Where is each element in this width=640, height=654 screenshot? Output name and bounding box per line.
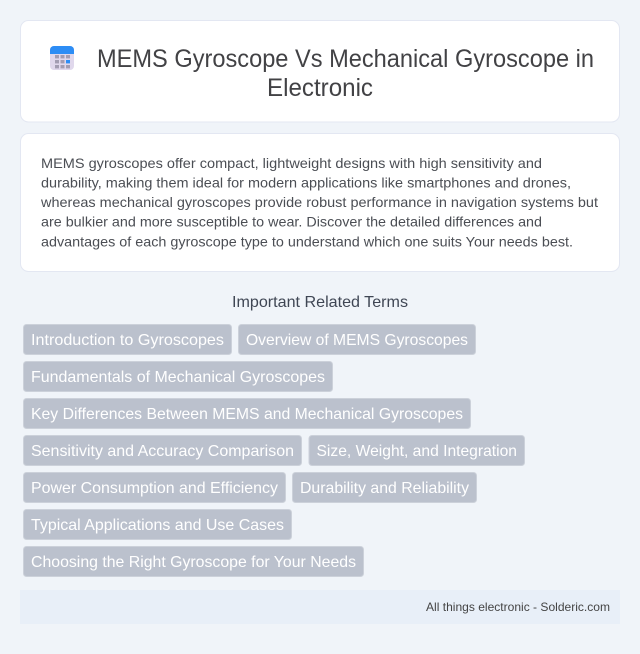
text block: description: durability, making them ideal for modern applications like smartphones and drones, <box>41 174 571 190</box>
tag: fundamentals <box>24 362 332 392</box>
title: MEMS Gyroscope Vs Mechanical Gyroscope in <box>97 45 594 73</box>
tag: overview <box>238 324 476 354</box>
panel: description <box>20 134 620 272</box>
text block: description: whereas mechanical gyroscopes provide robust performance in navigation systems but <box>40 194 598 210</box>
tag: durability <box>292 472 476 502</box>
tag: introduction: Introduction to Gyroscopes <box>31 332 224 349</box>
title: Electronic <box>267 74 373 102</box>
tag: key differences: Key Differences Between MEMS and Mechanical Gyroscopes <box>31 406 463 423</box>
tag: durability: Durability and Reliability <box>300 480 469 497</box>
text block: description <box>40 155 598 250</box>
tag: power <box>24 472 286 502</box>
tag: power: Power Consumption and Efficiency <box>31 480 278 497</box>
tag: choosing <box>24 546 364 576</box>
text block: description: are bulkier and more susceptible to wear. Discover the detailed differences and <box>41 214 542 230</box>
text block: description: advantages of each gyroscope type to understand which one suits Your needs best. <box>41 234 573 250</box>
tag: fundamentals: Fundamentals of Mechanical Gyroscopes <box>31 369 325 386</box>
text block: description: MEMS gyroscopes offer compact, lightweight designs with high sensitivity and <box>41 155 542 171</box>
heading: important related terms: Important Related Terms <box>232 294 408 311</box>
tag: introduction <box>24 324 232 354</box>
footer <box>20 590 620 624</box>
tag: sensitivity <box>24 436 302 466</box>
footer: All things electronic - Solderic.com <box>426 600 610 614</box>
tag: choosing: Choosing the Right Gyroscope for Your Needs <box>31 554 356 571</box>
icon: calendar <box>50 46 74 70</box>
tag: applications: Typical Applications and Use Cases <box>31 517 284 534</box>
tag: overview: Overview of MEMS Gyroscopes <box>246 332 468 349</box>
panel: related term tags <box>24 324 524 576</box>
tag: size: Size, Weight, and Integration <box>316 443 517 460</box>
tag: sensitivity: Sensitivity and Accuracy Comparison <box>31 443 294 460</box>
panel: header <box>20 20 620 122</box>
tag: key differences <box>24 398 470 428</box>
tag: size <box>309 436 524 466</box>
title <box>97 45 594 102</box>
tag: applications <box>24 510 292 540</box>
